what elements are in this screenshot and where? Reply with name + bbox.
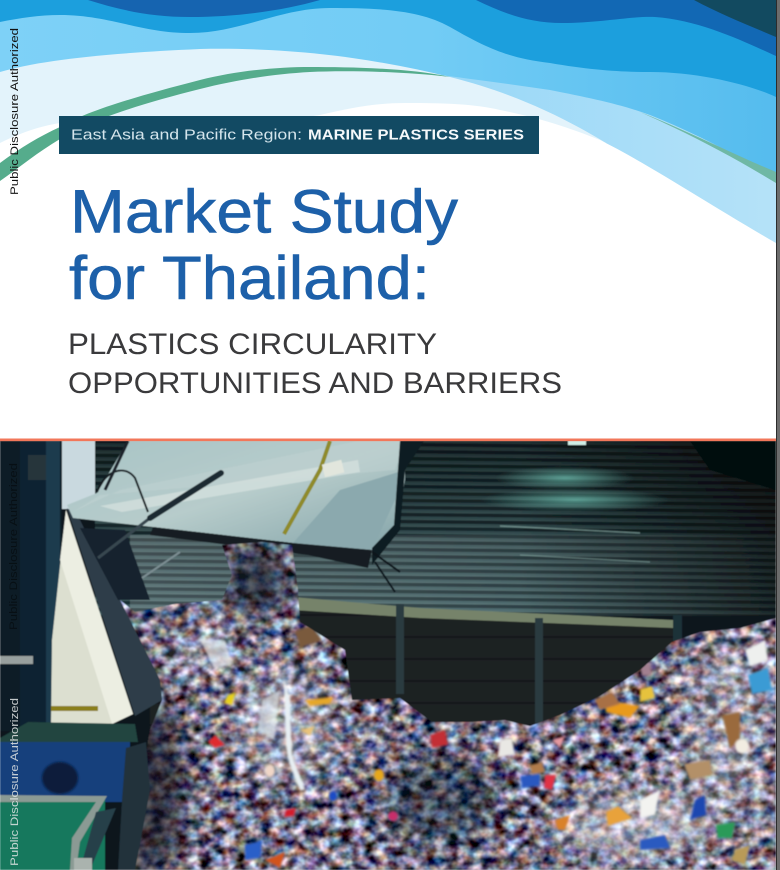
title — [69, 178, 459, 312]
subtitle — [68, 328, 562, 400]
wave: green ribbon right — [640, 112, 776, 183]
title: for Thailand: — [69, 244, 430, 312]
wooden barrier — [150, 597, 682, 730]
bin wheel side — [118, 742, 150, 870]
banner text: series: MARINE PLASTICS SERIES — [308, 126, 524, 144]
wave: dark teal corner — [694, 0, 776, 37]
orange divider — [0, 438, 776, 442]
watermark: public disclosure bottom: Public Disclosure Authorized — [9, 698, 21, 866]
bin rim — [0, 722, 138, 742]
truck yellow stripe — [284, 441, 330, 534]
wave header — [0, 0, 776, 243]
equipment bins — [0, 722, 150, 870]
wave: mid blue — [0, 0, 776, 97]
subtitle: OPPORTUNITIES AND BARRIERS — [68, 367, 562, 400]
watermark: public disclosure top: Public Disclosure Authorized — [9, 28, 21, 195]
wave: white body — [0, 103, 776, 300]
truck plate — [322, 460, 344, 477]
right edge strip — [776, 0, 780, 870]
wave: green ribbon left — [0, 67, 450, 181]
photo: plastic waste at recycling facility — [0, 441, 776, 870]
chute edge — [67, 508, 162, 716]
wave: dark blue left — [88, 0, 320, 17]
pile broad light and shade — [115, 545, 770, 870]
wave: light blue — [0, 8, 776, 172]
photo base — [0, 508, 776, 870]
chute interior — [80, 528, 150, 600]
panel yellow line — [51, 706, 98, 711]
series banner — [59, 116, 539, 154]
gas strut — [98, 518, 150, 558]
banner text: region: East Asia and Pacific Region: — [71, 126, 302, 144]
wave: dark blue right — [476, 0, 776, 56]
green bin — [0, 797, 105, 870]
wave: pale blue — [0, 48, 606, 143]
subtitle: PLASTICS CIRCULARITY — [68, 328, 437, 361]
white door panel — [62, 441, 95, 509]
trash pile — [110, 530, 776, 870]
white triangular panel — [51, 510, 133, 724]
corrugated wall — [95, 441, 776, 616]
blue bin — [0, 742, 130, 802]
debris — [200, 625, 772, 868]
truck bed — [67, 441, 424, 592]
hose — [97, 470, 148, 512]
watermark: ghost middle: Public Disclosure Authorized — [8, 463, 20, 630]
left dark frame — [0, 441, 62, 731]
rods — [105, 441, 128, 490]
title: Market Study — [70, 178, 459, 246]
blue bin shadow — [42, 762, 78, 794]
panel bright band — [60, 510, 133, 724]
wave: pale band right — [444, 76, 776, 243]
